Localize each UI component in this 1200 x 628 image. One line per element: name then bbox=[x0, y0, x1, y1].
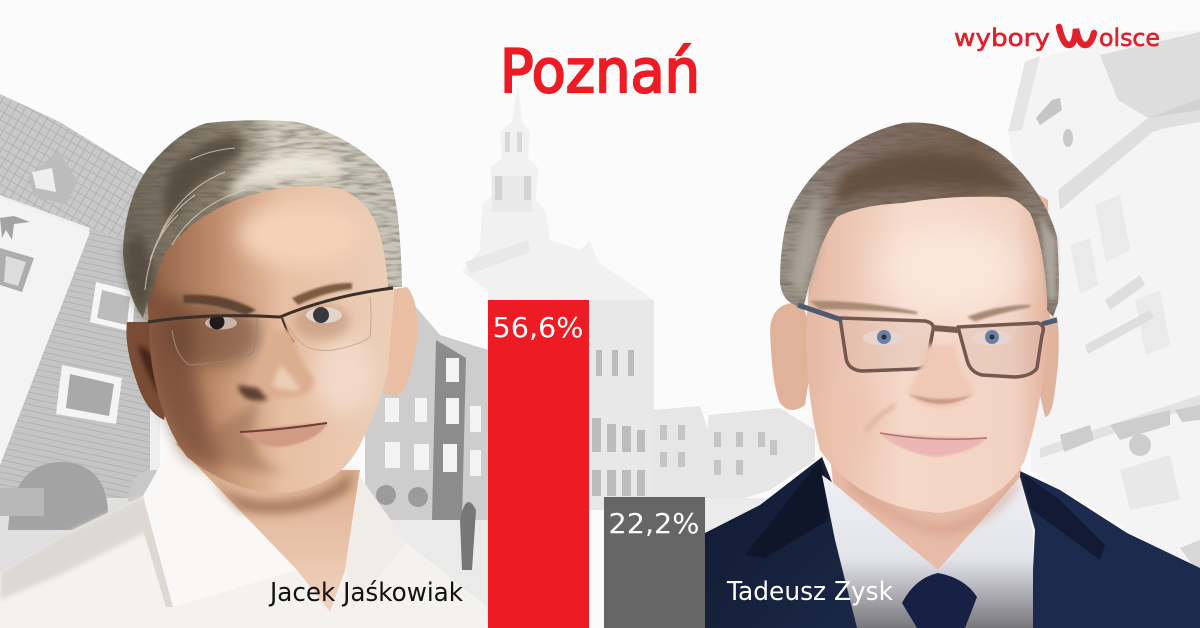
bar: Jacek Jaśkowiak 56,6% bbox=[488, 300, 589, 628]
face bbox=[146, 160, 396, 493]
face bbox=[806, 174, 1050, 513]
ears bbox=[770, 303, 815, 410]
white shirt bbox=[0, 443, 488, 628]
eyes bbox=[863, 330, 903, 346]
icon: WP mark bbox=[1059, 27, 1094, 45]
hair bbox=[780, 123, 1059, 317]
smile crease bbox=[866, 405, 895, 432]
lips bbox=[880, 433, 987, 457]
eyebrows bbox=[813, 302, 917, 313]
glasses bbox=[840, 318, 1043, 377]
central town hall tower bbox=[462, 84, 652, 420]
row of townhouses behind the bars bbox=[362, 300, 815, 628]
town hall arcade right of the tall bar bbox=[589, 300, 654, 510]
bar: Jacek Jaśkowiak 56,6%: 56,6% bbox=[492, 311, 584, 344]
nose bbox=[248, 330, 314, 398]
upper window bbox=[90, 282, 136, 332]
logo: wybory w Polsce: wybory bbox=[954, 24, 1050, 52]
forehead highlight bbox=[238, 203, 362, 267]
ears bbox=[126, 322, 178, 420]
logo: wybory w Polsce bbox=[954, 24, 1160, 52]
cheek highlight bbox=[315, 335, 375, 415]
hair bbox=[123, 120, 402, 318]
lower window bbox=[56, 365, 122, 424]
suit lapels bbox=[745, 457, 828, 558]
bar: Tadeusz Zysk 22,2%: 22,2% bbox=[608, 507, 700, 540]
white shirt collar bbox=[822, 475, 1033, 628]
eyes bbox=[205, 316, 237, 330]
rimless glasses bbox=[148, 288, 393, 365]
mouth bbox=[240, 423, 327, 447]
right palace facade bbox=[1008, 30, 1200, 575]
tie bbox=[902, 573, 977, 628]
eyebrows bbox=[183, 295, 256, 315]
neck bbox=[175, 443, 360, 612]
navy suit bbox=[705, 457, 860, 628]
statue bbox=[0, 216, 30, 240]
portrait: Tadeusz Zysk bbox=[705, 123, 1200, 628]
candidate name: Tadeusz Zysk: Tadeusz Zysk bbox=[726, 577, 893, 607]
left townhouse with tiled roof bbox=[0, 94, 170, 628]
nose bbox=[908, 345, 974, 408]
neck bbox=[830, 450, 1022, 570]
candidate name: Jacek Jaśkowiak: Jacek Jaśkowiak bbox=[268, 578, 463, 608]
bar: Tadeusz Zysk 22,2% bbox=[604, 497, 705, 628]
logo: wybory w Polsce: olsce bbox=[1099, 24, 1160, 52]
collar bbox=[143, 443, 297, 607]
portrait: Jacek Jaśkowiak bbox=[0, 120, 488, 628]
title: Poznań bbox=[500, 37, 700, 107]
left side face shadow bbox=[148, 290, 225, 470]
